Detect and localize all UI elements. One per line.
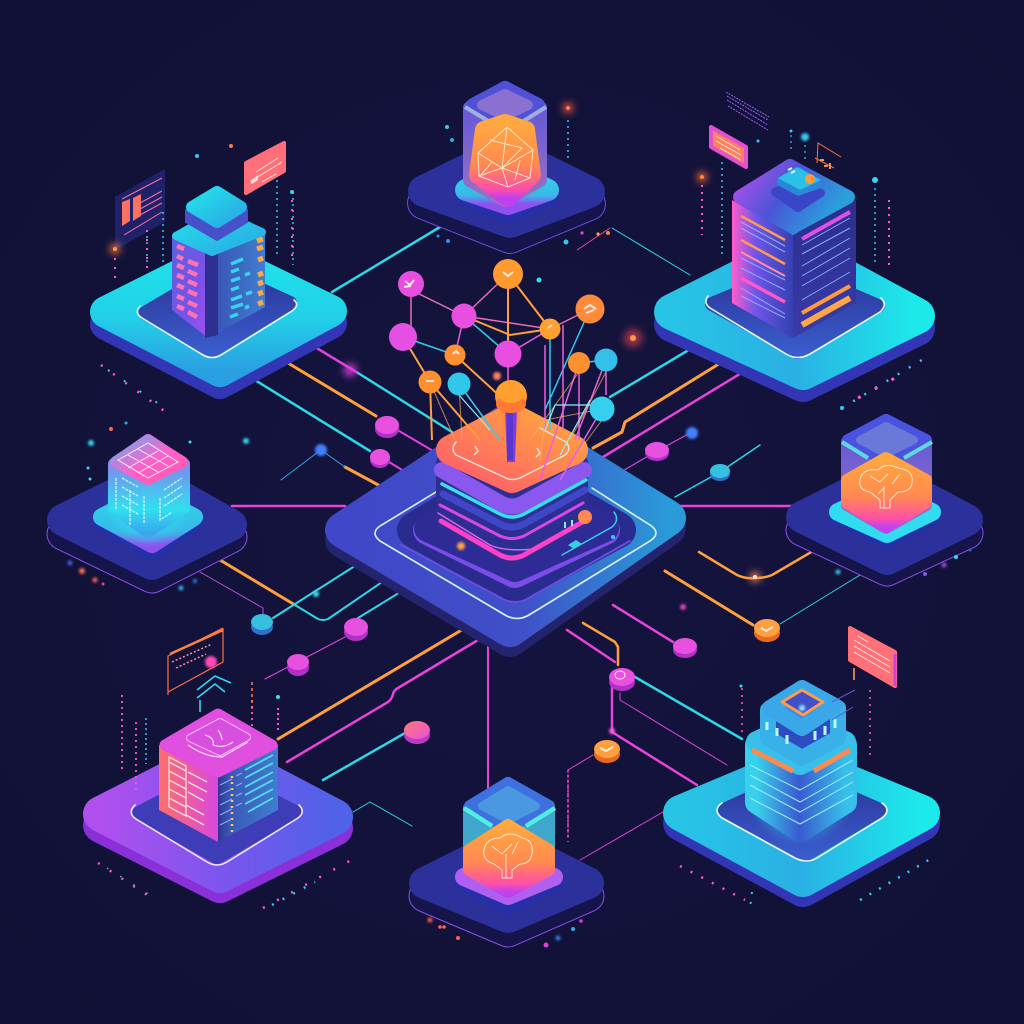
windows: cyan — [230, 259, 252, 317]
card: top left screen — [115, 169, 165, 250]
dots: bottom right — [680, 668, 932, 908]
node network — [389, 259, 642, 480]
dots: top centre — [436, 103, 610, 250]
node: orange lower left — [418, 370, 442, 394]
card: bottom left — [168, 628, 231, 712]
connector: magenta left — [370, 449, 390, 468]
stripes: left face — [741, 216, 785, 264]
lines: coral face — [169, 757, 207, 825]
node: cyan right — [594, 348, 618, 372]
stripes: right face — [802, 212, 850, 239]
lines: blue face — [245, 755, 273, 812]
server: top right — [732, 166, 856, 338]
dots: middle left — [68, 422, 249, 590]
platform: bottom right — [681, 763, 922, 889]
dots: top right — [697, 130, 930, 408]
platform: top left — [106, 256, 331, 383]
platform: bottom centre — [425, 842, 588, 931]
platform: bottom left — [101, 755, 335, 885]
pin — [495, 380, 527, 462]
connector: orange bottom — [594, 740, 620, 763]
card: top right lines — [726, 92, 841, 169]
connector nodes — [251, 416, 780, 763]
connector: magenta bottom — [609, 668, 635, 691]
node: orange mid right — [568, 352, 590, 374]
glow: trace sparks — [313, 364, 760, 734]
card: top left note — [246, 143, 284, 193]
node: cyan lower right — [590, 396, 614, 422]
node: magenta upper — [452, 304, 476, 328]
connector: blue glow right — [686, 427, 698, 439]
dots: bottom left — [98, 682, 355, 908]
node: magenta left — [389, 323, 417, 351]
platform: middle left — [63, 478, 231, 577]
stacked core — [438, 418, 592, 562]
windows: pink — [177, 246, 198, 317]
node: magenta centre — [494, 340, 522, 368]
cube: top centre — [465, 88, 546, 200]
connector: magenta right — [645, 442, 669, 461]
cube: middle right — [842, 420, 932, 528]
node: magenta top left — [398, 271, 424, 297]
connector: magenta far lower left — [287, 654, 309, 676]
network links — [403, 274, 606, 480]
card: top right note — [711, 127, 746, 167]
windows: orange — [257, 239, 263, 304]
connector: magenta lower left — [344, 618, 368, 641]
node: orange right — [576, 294, 604, 324]
platform: top centre — [424, 151, 589, 237]
connector: orange right — [754, 619, 780, 642]
cube: bottom centre — [464, 783, 555, 892]
cube: bottom left — [159, 714, 278, 842]
node: orange mid left — [444, 344, 466, 366]
node glyphs — [404, 272, 596, 381]
connector: blue glow left — [315, 444, 327, 456]
card: bottom right — [850, 628, 895, 686]
connector: cyan right — [710, 464, 730, 481]
connector: coral bottom left — [404, 721, 430, 744]
tower: bottom right — [750, 688, 853, 840]
dots: middle right — [836, 406, 972, 576]
dots: top left — [101, 144, 294, 415]
connector: cyan lower left — [251, 614, 273, 635]
tower: top left — [172, 192, 265, 338]
node: orange small — [540, 318, 560, 340]
node: cyan lower — [448, 372, 470, 396]
node: orange top — [493, 259, 523, 289]
dots: bottom centre — [428, 775, 583, 948]
glows — [624, 329, 642, 347]
platform: middle right — [802, 476, 967, 570]
cube: middle left — [110, 440, 186, 543]
connector: magenta upper left — [375, 416, 399, 438]
connector: magenta lower right — [673, 638, 697, 658]
platform: top right — [672, 250, 917, 384]
circuit traces — [200, 224, 860, 860]
platform: centre — [343, 420, 668, 639]
